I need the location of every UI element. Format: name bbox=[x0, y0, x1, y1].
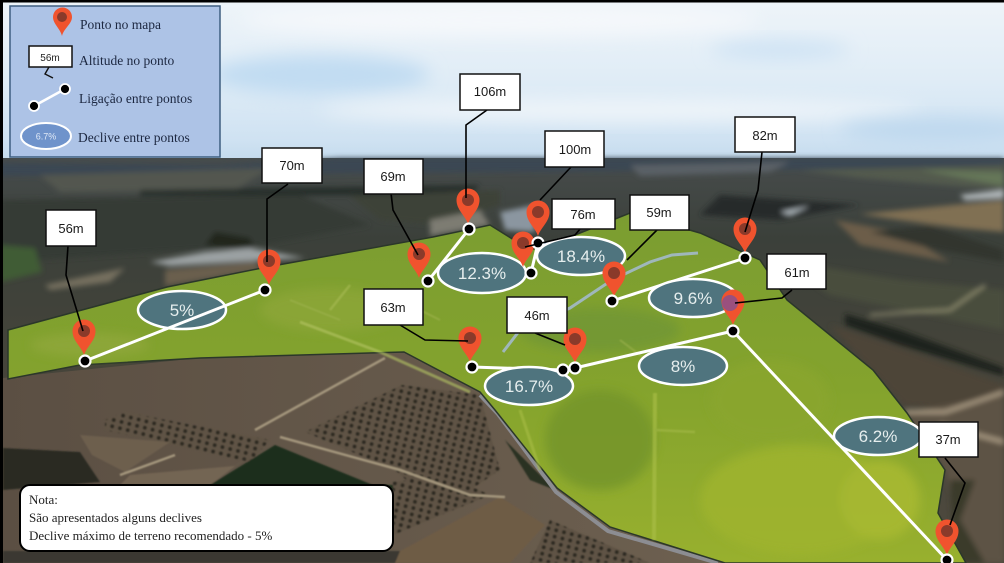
label 61m bbox=[767, 254, 826, 289]
slope 9.6% bbox=[649, 279, 737, 317]
label 63m: 63m bbox=[380, 300, 406, 315]
slope 5%: 5% bbox=[170, 301, 194, 320]
water patch bbox=[540, 238, 615, 250]
label 82m: 82m bbox=[752, 128, 778, 143]
label 37m: 37m bbox=[935, 432, 961, 447]
pin 61m bbox=[722, 290, 744, 325]
connection lines below slopes bbox=[428, 229, 745, 370]
pin 82m bbox=[734, 218, 756, 253]
road along boundary bbox=[480, 395, 718, 563]
foreground fields and orchards bbox=[3, 352, 725, 563]
pin 59m bbox=[602, 262, 626, 297]
slope 18.4%: 18.4% bbox=[557, 247, 605, 266]
label 63m bbox=[364, 289, 423, 325]
connection dots bbox=[80, 224, 952, 563]
slope 16.7%: 16.7% bbox=[505, 377, 553, 396]
legend: slope: 6.7% bbox=[36, 132, 56, 142]
pin 37m bbox=[936, 520, 958, 555]
connection lines above slopes bbox=[85, 290, 947, 560]
river bbox=[503, 253, 698, 352]
pin 106m bbox=[456, 188, 480, 224]
label 69m bbox=[364, 159, 423, 194]
legend: altitude label bbox=[29, 46, 174, 78]
map pins bbox=[72, 188, 958, 555]
legend: slope: Declive entre pontos bbox=[78, 130, 190, 145]
slope ellipses bbox=[138, 237, 922, 455]
legend: connection bbox=[29, 84, 192, 111]
slope 5% bbox=[138, 291, 226, 329]
label 61m: 61m bbox=[784, 265, 810, 280]
pin 46m bbox=[564, 328, 586, 363]
slope 6.2% bbox=[834, 417, 922, 455]
slope 12.3%: 12.3% bbox=[458, 264, 506, 283]
label 46m bbox=[507, 297, 567, 333]
label 59m bbox=[630, 195, 689, 230]
slope 6.2%: 6.2% bbox=[859, 427, 897, 446]
sky with clouds bbox=[0, 0, 1004, 165]
label 37m bbox=[919, 422, 978, 457]
label 82m bbox=[735, 117, 795, 152]
note box: Nota: bbox=[29, 492, 58, 507]
label 56m bbox=[46, 210, 96, 246]
pin 69m bbox=[408, 242, 430, 278]
label 59m: 59m bbox=[646, 205, 672, 220]
pin 63m bbox=[458, 326, 482, 362]
legend: altitude label: 56m bbox=[40, 53, 60, 64]
label 69m: 69m bbox=[380, 169, 406, 184]
legend: map pin: Ponto no mapa bbox=[80, 17, 161, 32]
label 106m bbox=[460, 74, 520, 110]
leader lines bbox=[66, 110, 965, 525]
slope 18.4% bbox=[537, 237, 625, 275]
legend: slope bbox=[21, 123, 190, 149]
pin 70m bbox=[258, 250, 280, 285]
altitude labels bbox=[46, 74, 978, 457]
pin 56m bbox=[72, 320, 96, 355]
label 100m: 100m bbox=[559, 142, 591, 157]
legend: map pin bbox=[53, 7, 161, 36]
slope 16.7% bbox=[485, 367, 573, 405]
legend: altitude label: Altitude no ponto bbox=[79, 53, 174, 68]
purple overlap marker on 9.6% ellipse bbox=[722, 295, 738, 311]
label 106m: 106m bbox=[474, 84, 506, 99]
slope 8% bbox=[639, 347, 727, 385]
note box: São apresentados alguns declives bbox=[29, 510, 202, 525]
slope 8%: 8% bbox=[671, 357, 695, 376]
pin 76m bbox=[512, 232, 534, 267]
label 56m: 56m bbox=[58, 221, 84, 236]
label 46m: 46m bbox=[524, 308, 550, 323]
label 100m bbox=[545, 131, 604, 167]
note box: Declive máximo de terreno recomendado - 5% bbox=[29, 528, 272, 543]
label 70m: 70m bbox=[279, 158, 305, 173]
label 76m: 76m bbox=[570, 207, 596, 222]
legend: connection: Ligação entre pontos bbox=[79, 91, 192, 106]
distant farmland bbox=[0, 158, 1004, 563]
pin 100m bbox=[526, 200, 550, 236]
note box bbox=[20, 485, 393, 551]
panel: terrain polygon bbox=[8, 213, 966, 563]
label 76m bbox=[552, 199, 615, 229]
slope 12.3% bbox=[438, 253, 526, 293]
legend panel bbox=[10, 6, 220, 157]
label 70m bbox=[262, 148, 322, 183]
slope 9.6%: 9.6% bbox=[674, 289, 712, 308]
